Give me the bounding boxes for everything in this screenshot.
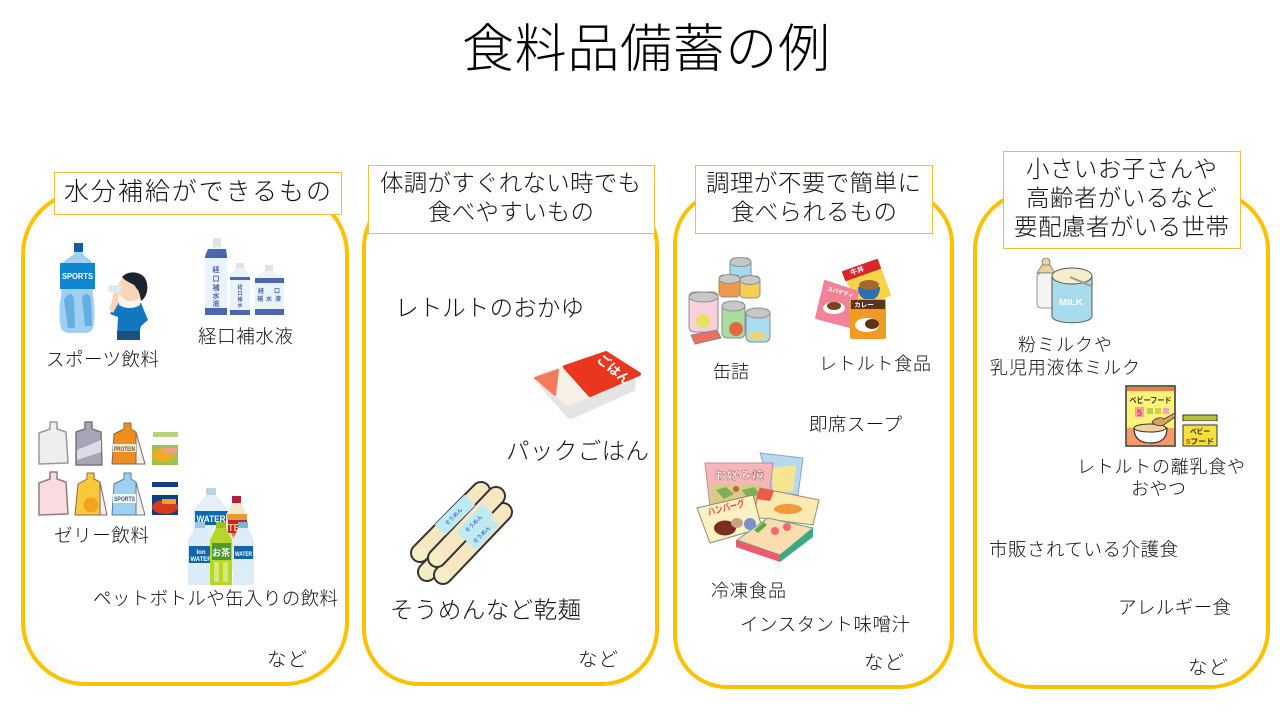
icon: retort food [816, 260, 890, 339]
icon: oral rehydration solution: 補 [212, 283, 220, 292]
icon: oral rehydration solution: 水 [212, 291, 220, 300]
icon: sports bottle [60, 243, 95, 333]
icon: dried noodles: そうめん [464, 513, 484, 534]
heading: special care: 小さいお子さんや [1026, 156, 1217, 182]
panel: easy to eat when unwell [364, 166, 657, 684]
panel: households needing special care [975, 152, 1268, 687]
icon: frozen food: ハンバーグ [706, 497, 746, 519]
label: jelly drinks: ゼリー飲料 [54, 525, 149, 546]
label: etc: など [578, 649, 618, 671]
icon: boy drinking [108, 272, 148, 340]
label: etc: など [267, 649, 307, 671]
label: instant miso soup: インスタント味噌汁 [740, 614, 910, 635]
label: somen dried noodles: そうめんなど乾麺 [390, 597, 581, 623]
icon: oral rehydration solution: 経 [237, 284, 243, 291]
label: retort rice porridge: レトルトのおかゆ [395, 295, 584, 321]
icon: dried noodles: そうめん [472, 524, 492, 545]
icon: jelly drinks [39, 422, 178, 515]
icon: dried noodles: そうめん [444, 506, 464, 527]
label: canned food: 缶詰 [713, 362, 749, 382]
icon: canned food [689, 258, 770, 344]
icon: plastic bottles: WATER [235, 551, 252, 558]
icon: retort food: 牛丼 [849, 264, 865, 277]
label: retort baby food and snacks: レトルトの離乳食や [1077, 457, 1245, 477]
icon: jelly drinks: SPORTS [114, 497, 135, 503]
title: 食料品備蓄の例 [462, 21, 830, 79]
heading: easy to eat [368, 166, 654, 234]
label: powdered and liquid milk [990, 335, 1140, 378]
icon: retort food: カレー [854, 301, 874, 309]
icon: jelly drinks: PROTEIN [114, 447, 135, 453]
label: etc: など [864, 652, 904, 674]
icon: baby food: ベビー [1190, 426, 1210, 436]
icon: frozen food: お好み焼 [714, 468, 764, 482]
heading: special care: 高齢者がいるなど [1026, 185, 1217, 211]
label: etc: など [1188, 657, 1228, 679]
label: packaged rice: パックごはん [506, 438, 649, 464]
heading: special care: 要配慮者がいる世帯 [1014, 214, 1229, 240]
label: instant soup: 即席スープ [809, 414, 902, 435]
icon: packaged rice [535, 351, 639, 418]
heading: hydration: 水分補給ができるもの [64, 178, 331, 206]
icon: plastic bottles: TEA [228, 523, 246, 534]
icon: oral rehydration solution: 水 [237, 302, 243, 309]
label: frozen food: 冷凍食品 [711, 581, 786, 601]
panel: hydration [23, 172, 347, 684]
icon: baby food: 5フード [1186, 437, 1214, 446]
icon: sports bottle: SPORTS [62, 272, 94, 281]
label: powdered and liquid milk: 乳児用液体ミルク [990, 358, 1140, 378]
icon: packaged rice: ごはん [594, 351, 634, 388]
icon: plastic bottles [188, 488, 254, 585]
label: powdered and liquid milk: 粉ミルクや [1018, 335, 1112, 355]
heading: no cooking: 食べられるもの [731, 199, 897, 225]
icon: oral rehydration solution: 経 [212, 265, 220, 274]
icon: baby food: 5 [1137, 408, 1142, 418]
icon: plastic bottles: WATER [196, 514, 226, 524]
icon: oral rehydration solution [205, 238, 284, 315]
icon: milk can and baby bottle [1037, 258, 1092, 323]
icon: plastic bottles: お茶 [212, 547, 230, 558]
heading: easy to eat: 体調がすぐれない時でも [380, 170, 641, 196]
heading: easy to eat: 食べやすいもの [428, 199, 594, 225]
icon: oral rehydration solution: 口 [212, 276, 220, 283]
label: retort food: レトルト食品 [819, 354, 931, 374]
label: retort baby food and snacks [1077, 457, 1245, 499]
heading: hydration [54, 172, 342, 214]
label: sports drink: スポーツ飲料 [46, 349, 159, 370]
icon: oral rehydration solution: 経口 [258, 287, 280, 295]
label: allergy food: アレルギー食 [1118, 597, 1231, 618]
heading: no cooking: 調理が不要で簡単に [706, 170, 921, 196]
icon: oral rehydration solution: 口 [237, 291, 243, 297]
heading: no cooking [696, 166, 932, 234]
icon: oral rehydration solution: 補水液 [257, 295, 281, 303]
heading: special care [1004, 152, 1240, 248]
icon: milk can and baby bottle: MILK [1059, 298, 1083, 307]
icon: baby food [1126, 386, 1217, 446]
label: commercial nursing care food: 市販されている介護食 [989, 539, 1178, 560]
icon: retort food: スパゲティ [826, 284, 855, 300]
icon: dried noodles [413, 491, 503, 582]
label: oral rehydration solution: 経口補水液 [198, 326, 293, 347]
label: retort baby food and snacks: おやつ [1131, 479, 1186, 499]
icon: plastic bottles: WATER [190, 556, 212, 563]
icon: baby food: ベビーフード [1130, 395, 1172, 405]
panel: no cooking required [675, 166, 952, 687]
icon: plastic bottles: Ion [196, 550, 206, 556]
icon: frozen food [697, 453, 819, 562]
label: bottled and canned drinks: ペットボトルや缶入りの飲料 [93, 588, 338, 609]
icon: oral rehydration solution: 補 [237, 296, 243, 303]
icon: oral rehydration solution: 液 [212, 299, 220, 308]
